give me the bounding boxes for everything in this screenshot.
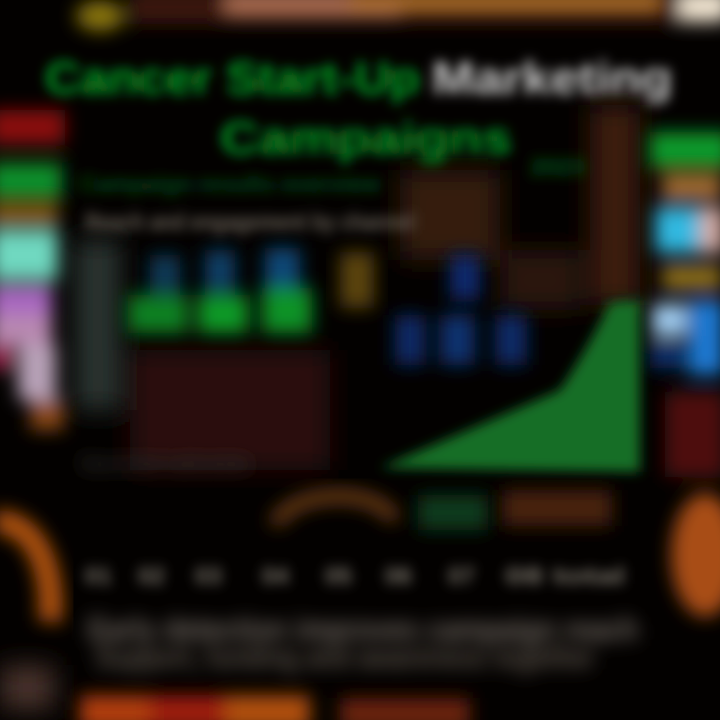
title [45, 52, 672, 164]
timeline labels: 08 total [505, 563, 625, 590]
panel: right column [650, 132, 720, 617]
panel: left column [0, 110, 65, 430]
title: Campaigns [220, 112, 512, 164]
icon: left arc [0, 522, 51, 622]
chart: blue cluster [395, 255, 527, 365]
footer bar [80, 695, 470, 720]
text block: footer summary: Support, funding and awareness together [95, 639, 595, 675]
icon: bottom left figure [0, 665, 55, 710]
icon: lower green block [418, 495, 488, 530]
timeline labels: 02 [138, 563, 165, 590]
icon: lower arc [275, 496, 395, 525]
text block: footer summary: Early detection improves campaign reach [88, 611, 638, 647]
subtitle text: Reach and engagement by channel [85, 209, 415, 236]
timeline labels: 04 [262, 563, 289, 590]
subtitle text: 2023 [530, 154, 585, 181]
icon: lower orange block [502, 490, 612, 526]
timeline labels [85, 563, 625, 590]
area chart [380, 300, 640, 472]
timeline labels: 01 [85, 563, 112, 590]
timeline labels: 07 [448, 563, 475, 590]
subtitle text [80, 154, 585, 236]
subtitle text: Campaign results overview [80, 171, 380, 198]
title: Marketing [432, 52, 672, 104]
text block: footer summary [88, 611, 638, 675]
title: Cancer Start-Up [45, 52, 420, 104]
timeline labels: 05 [325, 563, 352, 590]
background panels [75, 105, 640, 470]
bar chart: green and blue bars [128, 248, 312, 333]
top banner [76, 0, 720, 31]
timeline labels: 03 [195, 563, 222, 590]
timeline labels: 06 [385, 563, 412, 590]
caption text: Survival outcome [80, 453, 250, 475]
icon: gold marker [340, 252, 374, 308]
